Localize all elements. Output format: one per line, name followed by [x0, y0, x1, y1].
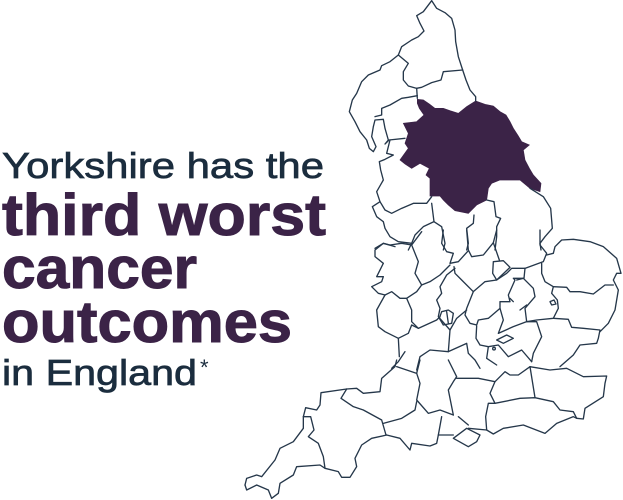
- midland and eastern county outlines: [372, 230, 621, 370]
- emphasis: outcomes: outcomes: [2, 290, 292, 355]
- Yorkshire highlighted region: [400, 99, 541, 213]
- emphasis: cancer: cancer: [2, 236, 197, 301]
- footnote asterisk: *: [200, 355, 209, 380]
- headline: [2, 145, 326, 393]
- map of England: [245, 1, 621, 498]
- emphasis: third worst: third worst: [2, 183, 326, 248]
- northern county outlines: [349, 1, 552, 250]
- intro line: Yorkshire has the: [2, 145, 324, 186]
- northern counties: [349, 1, 552, 250]
- closing line: in England: [2, 352, 197, 393]
- southern county outlines: [245, 360, 607, 498]
